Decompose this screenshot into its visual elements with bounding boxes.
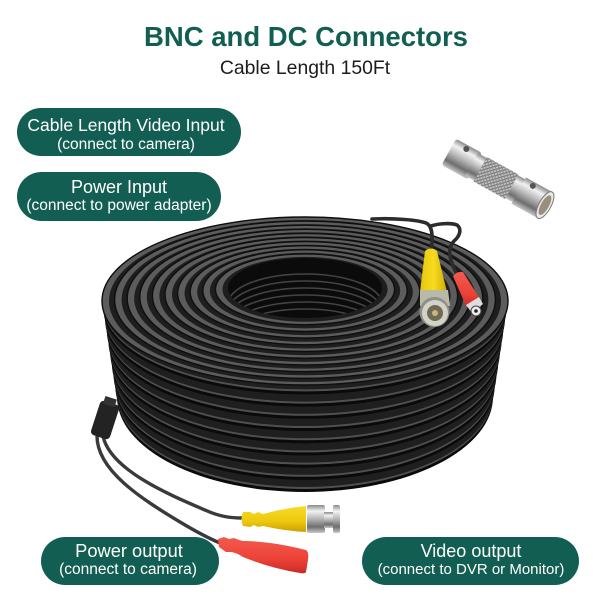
label: cable length video input <box>17 108 241 156</box>
yellow BNC input plug <box>420 248 450 327</box>
label: video output <box>362 537 579 585</box>
label: power input: Power Input <box>71 177 167 197</box>
output connectors <box>90 395 340 573</box>
cable coil <box>102 217 508 492</box>
yellow BNC output plug <box>242 505 340 533</box>
coil centre hole <box>228 258 382 318</box>
coil side windings <box>103 219 507 492</box>
coil top windings <box>102 217 508 385</box>
label: power output <box>41 537 219 585</box>
label: power output: (connect to camera) <box>59 561 197 578</box>
red DC input plug <box>453 272 483 316</box>
input connectors on coil <box>372 219 483 327</box>
label: video output: Video output <box>421 541 521 561</box>
label: cable length video input: (connect to camera) <box>57 136 195 153</box>
black cables to input connectors <box>372 219 460 275</box>
black cables from splitter <box>103 436 242 518</box>
label: cable length video input: Cable Length Video Input <box>27 115 225 135</box>
label: power input: (connect to power adapter) <box>26 197 212 214</box>
label: power output: Power output <box>75 540 183 561</box>
subtitle: Cable Length 150Ft <box>220 57 391 79</box>
label: video output: (connect to DVR or Monitor) <box>378 561 564 578</box>
label: power input <box>17 172 221 221</box>
cable splitter <box>90 395 122 440</box>
icon: BNC coupler adapter <box>441 139 557 221</box>
red DC output plug <box>218 537 308 573</box>
title: BNC and DC Connectors <box>144 21 468 52</box>
